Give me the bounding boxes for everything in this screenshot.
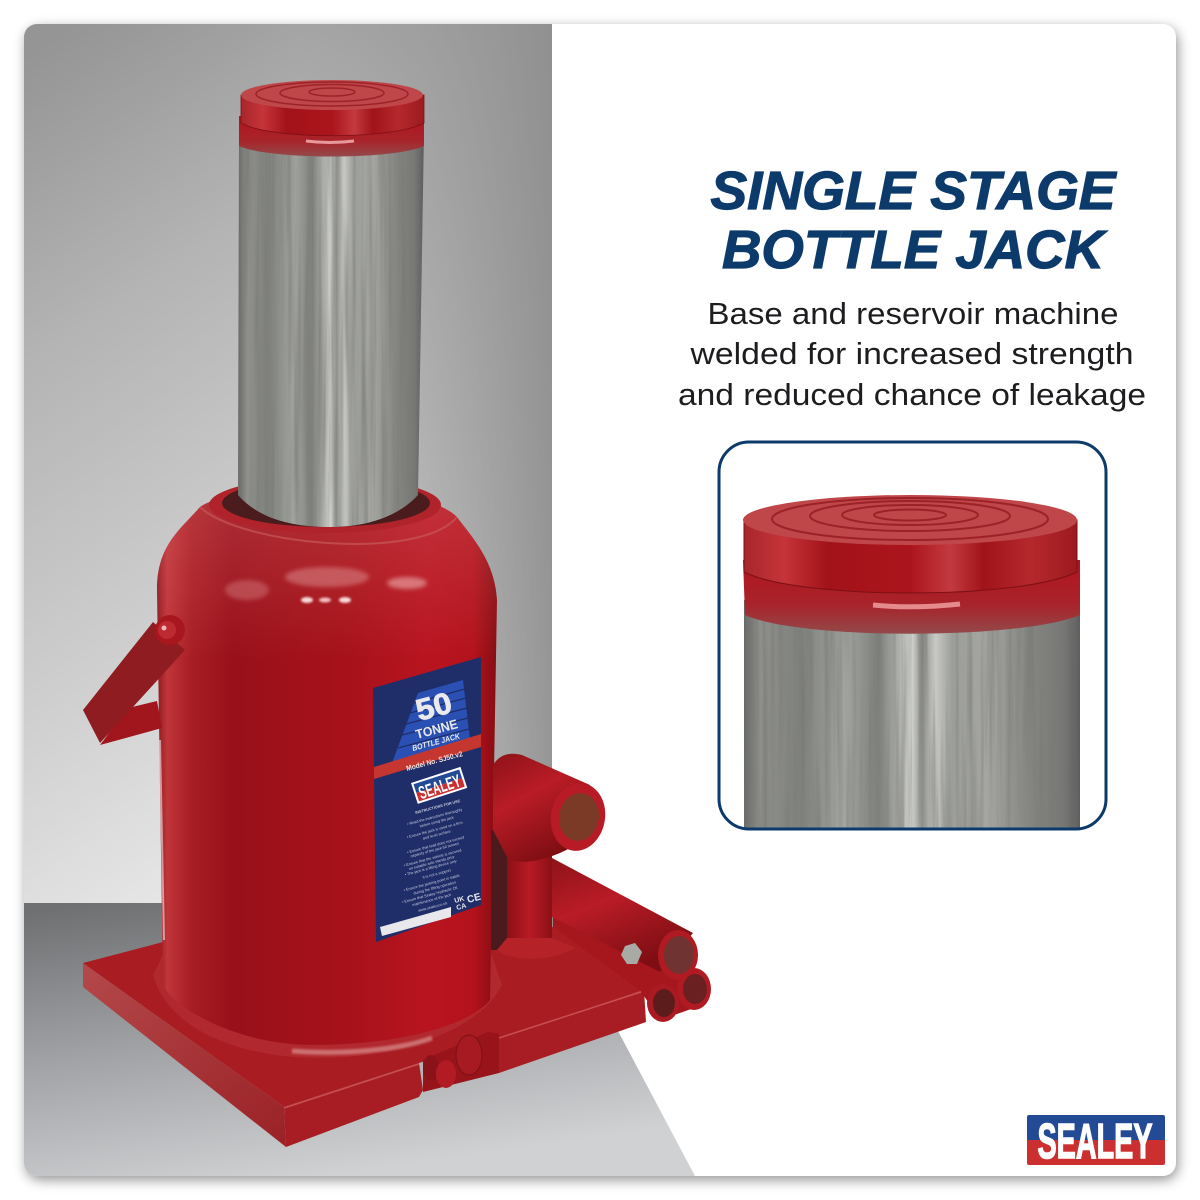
inset image xyxy=(743,495,1080,835)
release valve xyxy=(423,1032,499,1092)
painted collar xyxy=(743,560,1080,634)
neck opening xyxy=(222,479,430,527)
label logo: SEALEY xyxy=(416,771,463,803)
instructions: it is not a support xyxy=(422,868,452,880)
ram painted collar xyxy=(239,116,424,156)
instructions: INSTRUCTIONS FOR USE xyxy=(415,799,461,815)
instructions xyxy=(402,799,465,913)
description text: and reduced chance of leakage xyxy=(678,377,1146,412)
cap top xyxy=(743,495,1077,545)
plate left face xyxy=(83,963,286,1147)
label on cylinder: CA xyxy=(456,903,467,912)
instructions: during the lifting operation xyxy=(413,880,456,896)
instructions: • Ensure that Sealey Hydraulic Oil xyxy=(402,886,458,904)
inset frame xyxy=(719,442,1106,829)
BOTTLE JACK text: BOTTLE JACK xyxy=(411,731,462,753)
instructions: www.sealey.co.uk xyxy=(418,901,448,913)
pump mechanism xyxy=(491,830,508,950)
weld flange xyxy=(153,950,502,1058)
collar highlight xyxy=(306,141,354,142)
pump post xyxy=(497,855,575,959)
studio background panel xyxy=(24,24,695,1176)
dome lighter tone xyxy=(157,488,497,660)
heading: SINGLE STAGE xyxy=(710,161,1118,221)
label on cylinder xyxy=(373,657,483,942)
UKCA marks: UK xyxy=(454,896,465,905)
left body light edge xyxy=(160,740,164,940)
dome highlights xyxy=(225,567,427,603)
instructions: before using the jack xyxy=(419,816,454,829)
instructions: • Read the instructions thoroughly xyxy=(407,808,463,826)
instructions: and level surface xyxy=(422,829,451,841)
saddle cap xyxy=(241,80,424,136)
floor xyxy=(24,903,695,1176)
description text: Base and reservoir machine xyxy=(708,296,1118,331)
cap side xyxy=(744,520,1077,593)
description text xyxy=(678,296,1146,412)
detail inset: close-up of saddle xyxy=(719,442,1106,835)
instructions: • Ensure the jack is used on a firm xyxy=(406,821,463,839)
long pump handle tube xyxy=(552,858,698,980)
label background xyxy=(373,657,481,942)
instructions: • Ensure the jacking point is stable xyxy=(403,874,460,892)
pump socket xyxy=(493,754,610,862)
wall xyxy=(24,24,552,904)
instructions: maintenance of the jack xyxy=(412,893,452,907)
shoulder ring xyxy=(200,507,457,544)
cap rings xyxy=(772,498,1048,540)
description text: welded for increased strength xyxy=(689,336,1134,371)
serial number box xyxy=(380,907,451,936)
instructions: • Ensure that the vehicle is secured xyxy=(404,848,462,868)
instructions: • Ensure that load does not exceed xyxy=(407,835,465,855)
TONNE text: TONNE xyxy=(414,716,460,742)
instructions: capacity of the jack 50 tonnes xyxy=(410,842,460,858)
hydraulic ram xyxy=(235,130,427,530)
red band xyxy=(374,734,481,779)
CE mark: CE xyxy=(466,892,483,906)
heading: BOTTLE JACK xyxy=(722,220,1108,280)
cylinder body xyxy=(157,488,497,1045)
label logo xyxy=(411,767,467,804)
neck lip xyxy=(209,477,441,533)
lower handle tubes xyxy=(553,917,711,1022)
plate front face xyxy=(284,1063,423,1147)
model number: Model No. SJ50.v2 xyxy=(405,749,464,773)
plate top face xyxy=(83,920,644,1107)
capacity 50: 50 xyxy=(412,687,456,728)
heading xyxy=(710,161,1118,280)
plate front edge highlight xyxy=(284,1064,419,1108)
instructions: on suitable axle stands prior xyxy=(408,855,456,871)
bottle jack product xyxy=(83,80,711,1147)
instructions: • The jack is a lifting device only xyxy=(404,859,457,877)
blue stripes xyxy=(392,680,470,763)
carry handle xyxy=(83,615,185,745)
base plate xyxy=(83,920,646,1147)
